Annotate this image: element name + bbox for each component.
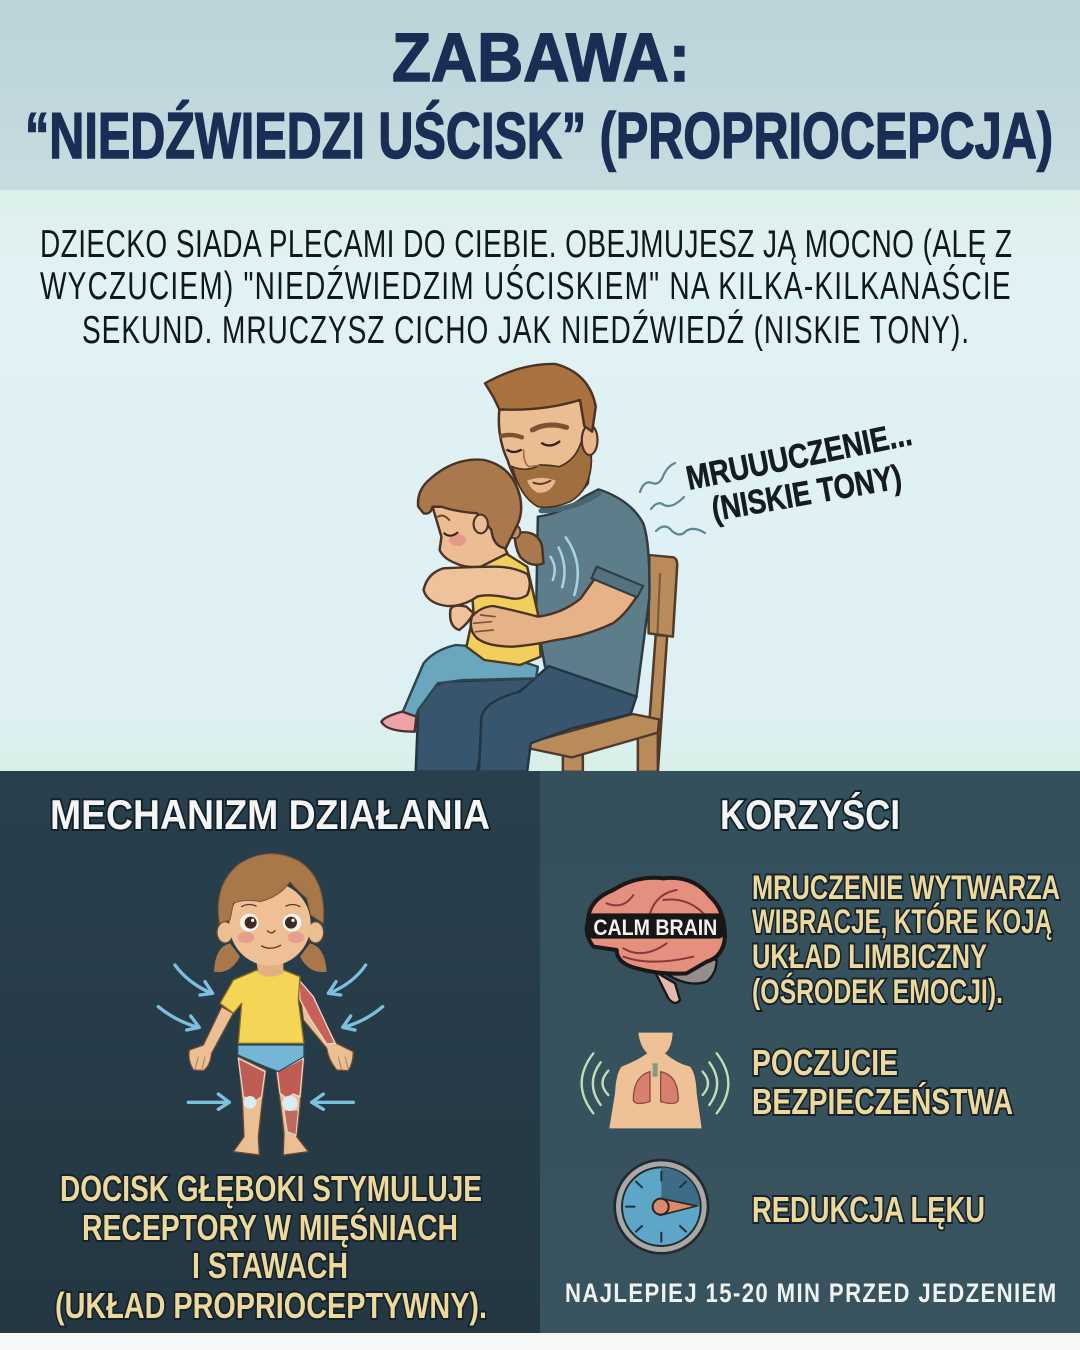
title line 1: ZABAWA: [392, 19, 690, 96]
benefit: limbic text: UKŁAD LIMBICZNY [752, 938, 987, 976]
explanation text: I STAWACH [192, 1245, 348, 1286]
illustration: father hugging child on a chair [381, 364, 677, 772]
speech label: humming: (NISKIE TONY) [709, 458, 904, 529]
explanation text: RECEPTORY W MIĘŚNIACH [82, 1206, 458, 1248]
father shirt [536, 489, 649, 697]
panel: mechanism [0, 771, 540, 1333]
instruction text: WYCZUCIEM) "NIEDŹWIEDZIM UŚCISKIEM" NA KILKA-KILKANAŚCIE [40, 263, 1011, 308]
closed eyes and brows [501, 425, 566, 467]
benefit: safety text [752, 1042, 1013, 1122]
heading: benefits: KORZYŚCI [720, 790, 900, 838]
icon: torso with lungs [582, 1033, 728, 1128]
beard [512, 430, 591, 507]
head [217, 922, 233, 943]
ponytail [515, 532, 544, 565]
vibration arcs [582, 1053, 728, 1113]
illustration: child body with pressure arrows [158, 854, 383, 1155]
benefit: anxiety text: REDUKCJA LĘKU [752, 1189, 985, 1230]
sound waves [640, 463, 705, 534]
explanation text: DOCISK GŁĘBOKI STYMULUJE [60, 1168, 482, 1209]
sleeve [591, 567, 643, 597]
chest vibration marks [550, 537, 578, 595]
chair [465, 555, 677, 772]
arm muscles [299, 980, 335, 1044]
pigtails [214, 943, 240, 972]
eyes [240, 914, 259, 932]
ear [582, 425, 597, 455]
arms [189, 1007, 233, 1071]
hair [218, 854, 324, 923]
icon: gauge [615, 1160, 708, 1253]
knee joints [244, 1096, 256, 1109]
benefit: limbic text [752, 869, 1060, 1011]
brain label: CALM BRAIN [593, 915, 717, 940]
child jeans [402, 645, 538, 720]
icon: calm brain [586, 878, 725, 1003]
speech label: humming: MRUUUCZENIE... [683, 415, 915, 498]
father legs [416, 666, 636, 772]
panel: benefits [540, 771, 1080, 1333]
instruction text [40, 223, 1012, 352]
timing note: NAJLEPIEJ 15-20 MIN PRZED JEDZENIEM [565, 1279, 1056, 1309]
legs [233, 1057, 266, 1155]
instruction text: DZIECKO SIADA PLECAMI DO CIEBIE. OBEJMUJESZ JĄ MOCNO (ALĘ Z [40, 223, 1012, 266]
underwear [238, 1045, 304, 1072]
hair [485, 364, 596, 432]
hair [418, 460, 521, 548]
heading: mechanism: MECHANIZM DZIAŁANIA [50, 791, 490, 838]
child head [418, 460, 544, 567]
instruction text: SEKUND. MRUCZYSZ CICHO JAK NIEDŹWIEDŹ (NISKIE TONY). [82, 309, 969, 352]
yellow shirt [220, 970, 304, 1043]
benefit: safety text: POCZUCIE [752, 1042, 898, 1083]
pressure arrows [158, 965, 383, 1109]
child shirt [466, 553, 541, 665]
explanation text [55, 1168, 487, 1326]
father arm and hand [471, 573, 639, 647]
panel: activity description [0, 190, 1080, 771]
child arms [450, 606, 474, 630]
leg muscles [238, 1058, 265, 1102]
explanation text: (UKŁAD PROPRIOCEPTYWNY). [55, 1285, 487, 1326]
father head [485, 364, 597, 507]
speech label: humming [683, 415, 915, 529]
benefit: safety text: BEZPIECZEŃSTWA [752, 1081, 1013, 1122]
child sock [381, 712, 416, 732]
header band [0, 0, 1080, 190]
